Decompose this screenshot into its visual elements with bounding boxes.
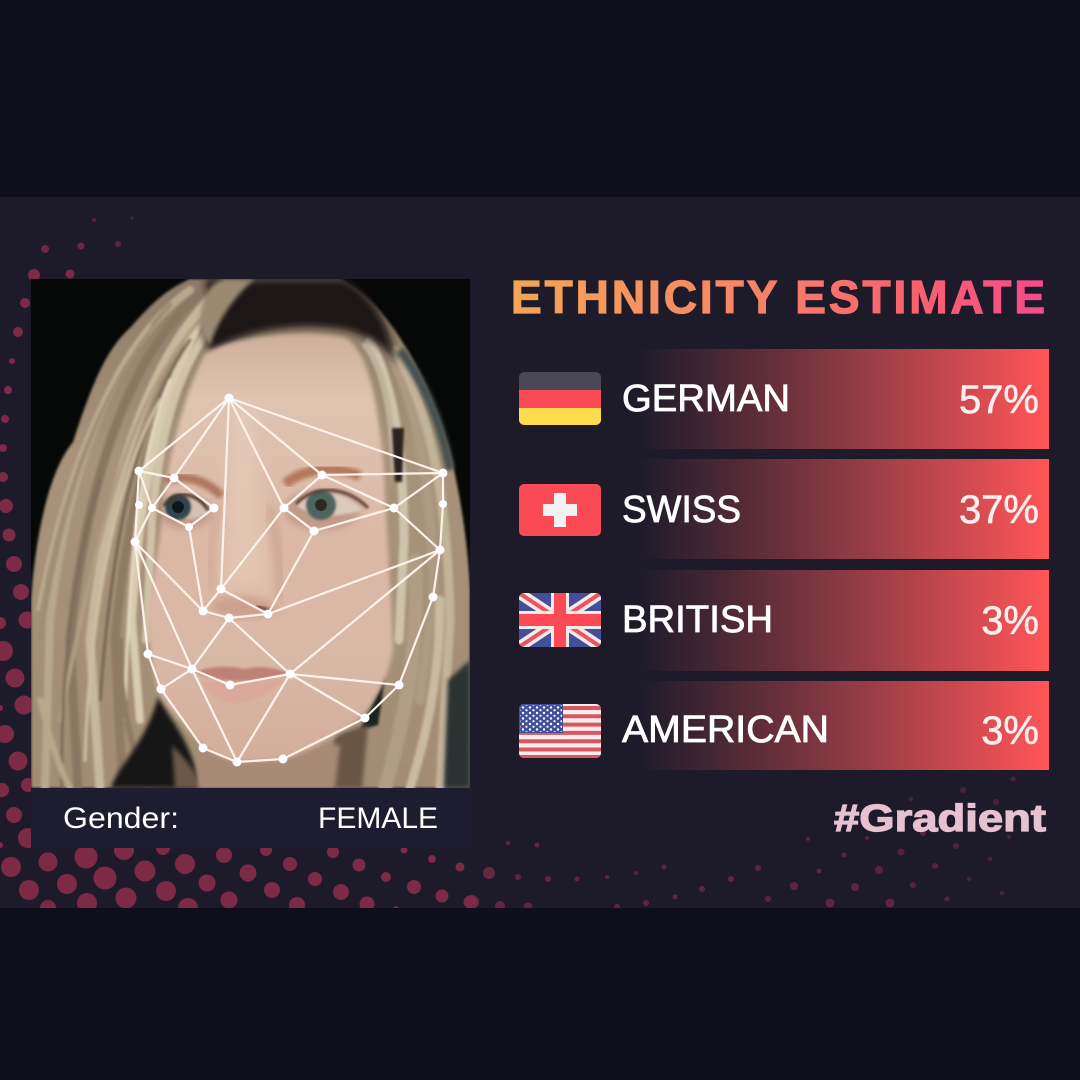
portrait photo — [31, 279, 470, 788]
row: American — [519, 681, 1049, 770]
row: Swiss: 37% — [959, 488, 1039, 532]
infographic canvas — [0, 197, 1080, 908]
row: Swiss — [519, 459, 1049, 559]
halftone dots: left and bottom — [0, 216, 1016, 918]
gender panel: FEMALE — [318, 802, 438, 835]
mesh nodes — [130, 394, 448, 766]
row: British — [519, 570, 1049, 671]
hashtag: #Gradient — [834, 798, 1046, 840]
row: American: 3% — [981, 709, 1039, 753]
row: Swiss: SWISS — [622, 489, 741, 531]
flag: United Kingdom — [519, 593, 601, 647]
gender panel — [31, 788, 472, 848]
title: ETHNICITY ESTIMATE — [511, 271, 1045, 323]
gender panel: Gender: — [63, 802, 179, 835]
row: German — [519, 349, 1049, 449]
flag: Switzerland — [519, 484, 601, 536]
row: American: AMERICAN — [622, 709, 829, 751]
flag: Germany — [519, 372, 601, 425]
mesh lines — [135, 398, 443, 762]
row: British: 3% — [981, 599, 1039, 643]
flag: United States — [519, 704, 601, 758]
row: German: GERMAN — [622, 378, 790, 420]
face mesh overlay — [130, 394, 448, 766]
row: German: 57% — [959, 378, 1039, 422]
row: British: BRITISH — [622, 599, 773, 641]
background band — [0, 197, 1080, 908]
